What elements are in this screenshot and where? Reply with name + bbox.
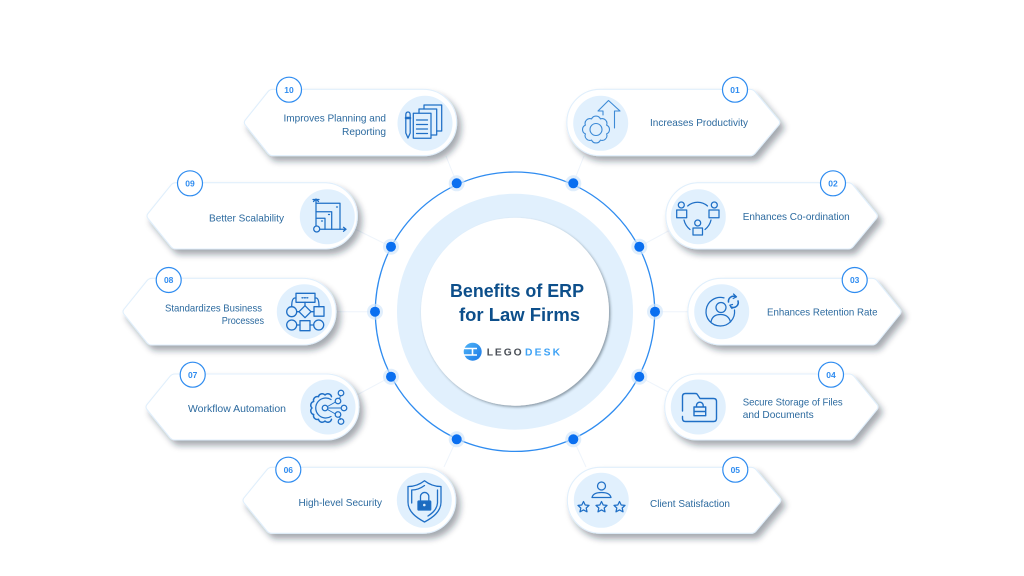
inner white circle (421, 218, 609, 406)
card 08: Standardizes Business Processes: Standardizes Business (165, 304, 262, 315)
icon: client with three stars (578, 482, 625, 512)
card 04: Secure Storage of Files and Documents: 04 (826, 370, 836, 380)
outer ring (375, 172, 655, 451)
card 01: Increases Productivity (567, 77, 780, 156)
logo: Legodesk (464, 343, 561, 361)
card 05: Client Satisfaction: Client Satisfaction (650, 499, 730, 510)
ring node dots (367, 175, 663, 447)
card 09: Better Scalability: Better Scalability (209, 214, 285, 225)
icon: person with refresh arrows (706, 294, 738, 326)
card 03: Enhances Retention Rate (688, 268, 901, 345)
card 08: Standardizes Business Processes: Processes (222, 316, 264, 327)
card 01: Increases Productivity: 01 (730, 85, 740, 95)
card 06: High-level Security (243, 457, 456, 533)
card 05: Client Satisfaction (567, 457, 781, 533)
card 04: Secure Storage of Files and Documents: and Documents (743, 410, 814, 421)
connector lines (336, 156, 688, 467)
card 10: Improves Planning and Reporting: Improves Planning and (284, 114, 386, 125)
card 08: Standardizes Business Processes: 08 (164, 275, 174, 285)
card 10: Improves Planning and Reporting: Reporting (342, 127, 386, 138)
title: for Law Firms (459, 304, 580, 325)
card 02: Enhances Co-ordination (666, 171, 877, 249)
icon: process flowchart (287, 293, 324, 331)
card 07: Workflow Automation (146, 362, 359, 440)
icon: documents and pen (406, 105, 442, 138)
card 07: Workflow Automation: Workflow Automation (188, 404, 286, 415)
icon: three connected people (677, 202, 719, 235)
card 03: Enhances Retention Rate: Enhances Retention Rate (767, 308, 878, 319)
title (450, 280, 584, 325)
card 04: Secure Storage of Files and Documents (665, 362, 878, 440)
card 08: Standardizes Business Processes (123, 268, 336, 345)
central hub (367, 172, 663, 451)
title: Benefits of ERP (450, 280, 584, 301)
card 06: High-level Security: High-level Security (298, 498, 383, 509)
card 09: Better Scalability: 09 (185, 178, 195, 188)
icon: shield with padlock (408, 481, 441, 522)
card 06: High-level Security: 06 (284, 465, 293, 475)
card 05: Client Satisfaction: 05 (731, 465, 740, 475)
card 10: Improves Planning and Reporting: 10 (284, 85, 294, 95)
card 04: Secure Storage of Files and Documents: Secure Storage of Files (743, 398, 843, 409)
logo: Legodesk: LEGO (487, 348, 522, 358)
card 07: Workflow Automation: 07 (188, 370, 198, 380)
icon: scaling squares on axes (313, 199, 346, 232)
card 10: Improves Planning and Reporting (244, 77, 457, 156)
icon: gear with arrow (583, 100, 620, 143)
logo: Legodesk: DESK (525, 348, 561, 358)
card 09: Better Scalability (147, 171, 357, 249)
icon: locked folder (682, 394, 716, 422)
card 02: Enhances Co-ordination: 02 (828, 178, 838, 188)
card 03: Enhances Retention Rate: 03 (850, 275, 860, 285)
light blue band (397, 194, 633, 430)
icon: gear with workflow nodes (311, 390, 347, 424)
card 01: Increases Productivity: Increases Productivity (650, 118, 749, 129)
card 02: Enhances Co-ordination: Enhances Co-ordination (743, 212, 850, 223)
